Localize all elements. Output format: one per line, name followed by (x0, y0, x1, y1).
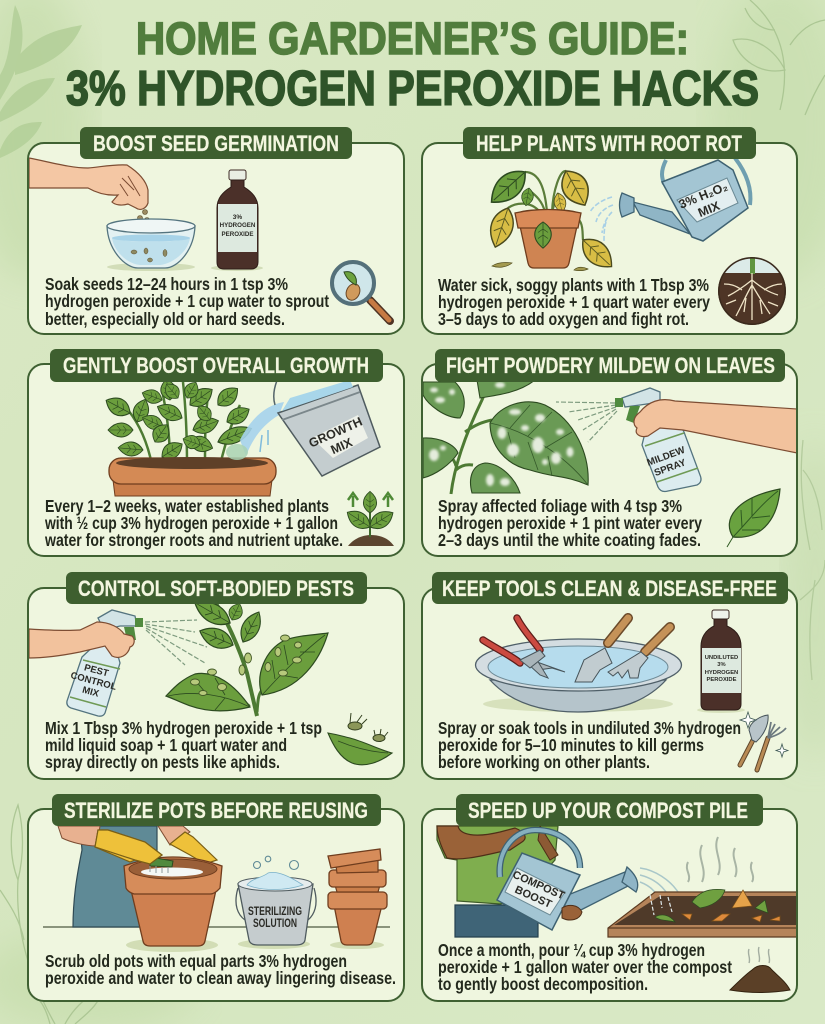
heading (52, 794, 381, 826)
illustration: person watering compost bed (437, 826, 797, 937)
decorative leaves: top left (0, 5, 82, 158)
panel: compost pile (422, 794, 797, 1001)
bottle label: PEROXIDE (222, 231, 253, 238)
text block: hydrogen peroxide + 1 cup water to sprout (45, 291, 329, 311)
bottle label (220, 214, 256, 238)
can label: MIX (696, 199, 723, 220)
panel: root rot (422, 127, 797, 334)
heading: SPEED UP YOUR COMPOST PILE (468, 798, 748, 823)
text block: to gently boost decomposition. (438, 974, 648, 994)
panel: sterilize pots (28, 794, 404, 1001)
bucket label (248, 906, 302, 930)
icon: magnifier with seedling (332, 262, 390, 321)
text block: mild liquid soap + 1 quart water and (45, 735, 287, 755)
bottle label (66, 660, 121, 704)
bottle label: PEST (83, 662, 110, 680)
bottle label: 3% (233, 214, 242, 221)
can label: BOOST (513, 884, 554, 911)
icon: root cross-section (718, 257, 786, 325)
bucket label: SOLUTION (253, 918, 297, 930)
text block (438, 940, 732, 994)
heading: CONTROL SOFT-BODIED PESTS (78, 576, 354, 601)
title: HOME GARDENER’S GUIDE: (136, 13, 689, 64)
text block: peroxide and water to clean away lingering disease. (45, 968, 396, 988)
bucket label: STERILIZING (248, 906, 302, 918)
bottle label: CONTROL (69, 670, 118, 693)
text block: hydrogen peroxide + 1 quart water every (438, 292, 710, 312)
icon: sprout with arrows (343, 491, 397, 546)
text block: Spray affected foliage with 4 tsp 3% (438, 496, 682, 516)
bottle label: UNDILUTED (705, 655, 738, 661)
panel: clean tools (422, 572, 797, 779)
illustration: potted plants and bucket (102, 378, 380, 496)
icon: clean tools with sparkles (740, 712, 788, 770)
can label: 3% H₂O₂ (677, 179, 730, 212)
text block: before working on other plants. (438, 752, 650, 772)
heading (80, 127, 352, 159)
text block: Mix 1 Tbsp 3% hydrogen peroxide + 1 tsp (45, 718, 322, 738)
text block: Scrub old pots with equal parts 3% hydrogen (45, 951, 347, 971)
bottle label: 3% (717, 662, 726, 668)
text block: peroxide + 1 gallon water over the compost (438, 957, 732, 977)
heading (66, 572, 367, 604)
text block: Soak seeds 12–24 hours in 1 tsp 3% (45, 274, 288, 294)
bottle label: HYDROGEN (705, 670, 738, 676)
heading (463, 127, 756, 159)
illustration: mildewed leaves and spray bottle (423, 380, 797, 494)
can label: COMPOST (511, 869, 567, 902)
decorative leaves: right edge (800, 440, 825, 680)
text block: Spray or soak tools in undiluted 3% hydrogen (438, 718, 741, 738)
heading: BOOST SEED GERMINATION (93, 131, 339, 156)
text block: better, especially old or hard seeds. (45, 309, 285, 329)
text block: Water sick, soggy plants with 1 Tbsp 3% (438, 275, 709, 295)
text block (438, 496, 702, 550)
heading (435, 349, 785, 382)
heading (50, 349, 383, 382)
bottle label (705, 655, 738, 683)
text block: Once a month, pour ¼ cup 3% hydrogen (438, 940, 705, 960)
text block (44, 496, 343, 550)
panel: soft-bodied pests (28, 572, 404, 779)
panel: overall growth (28, 349, 404, 556)
heading: HELP PLANTS WITH ROOT ROT (476, 131, 742, 156)
icon: green leaf (727, 489, 780, 547)
icon: compost heap with steam (730, 947, 790, 992)
text block (45, 718, 322, 772)
illustration: tools soaking in basin (476, 610, 745, 713)
text block: spray directly on pests like aphids. (45, 752, 280, 772)
bucket label (307, 415, 371, 464)
bottle label: PEROXIDE (707, 677, 737, 683)
illustration: wilting plant and watering can (484, 158, 750, 274)
panel: boost seed germination (28, 127, 404, 334)
bottle label: HYDROGEN (220, 222, 256, 229)
decorative leaves: top right (733, 0, 825, 115)
illustration: spray bottle and infested plant (29, 595, 328, 716)
heading: GENTLY BOOST OVERALL GROWTH (63, 353, 369, 378)
spray label: MILDEW (646, 445, 687, 469)
text block (438, 275, 710, 329)
spray label: SPRAY (653, 457, 688, 479)
text block: Every 1–2 weeks, water established plants (45, 496, 329, 516)
bottle label: MIX (81, 685, 101, 700)
title (66, 13, 759, 116)
can label (677, 179, 735, 226)
bucket label: MIX (329, 435, 355, 457)
text block: peroxide for 5–10 minutes to kill germs (438, 735, 704, 755)
spray label (646, 445, 691, 480)
heading: STERILIZE POTS BEFORE REUSING (64, 798, 368, 823)
illustration: gloved hands scrubbing pot, bucket, stacked pots (43, 826, 390, 952)
text block (45, 274, 329, 329)
can label (505, 869, 567, 914)
text block: hydrogen peroxide + 1 pint water every (438, 513, 702, 533)
text block: water for stronger roots and nutrient uptake. (44, 530, 343, 550)
text block: 3–5 days to add oxygen and fight rot. (438, 309, 689, 329)
panel: powdery mildew (422, 349, 797, 556)
illustration: hand dropping seeds into bowl (29, 158, 263, 271)
heading (456, 794, 763, 826)
text block (45, 951, 396, 988)
text block: with ½ cup 3% hydrogen peroxide + 1 gallon (44, 513, 338, 533)
text block (438, 718, 741, 772)
bucket label: GROWTH (307, 415, 364, 450)
text block: 2–3 days until the white coating fades. (438, 530, 701, 550)
icon: aphids on leaf (328, 713, 392, 765)
decorative leaves: bottom left (0, 805, 105, 1024)
